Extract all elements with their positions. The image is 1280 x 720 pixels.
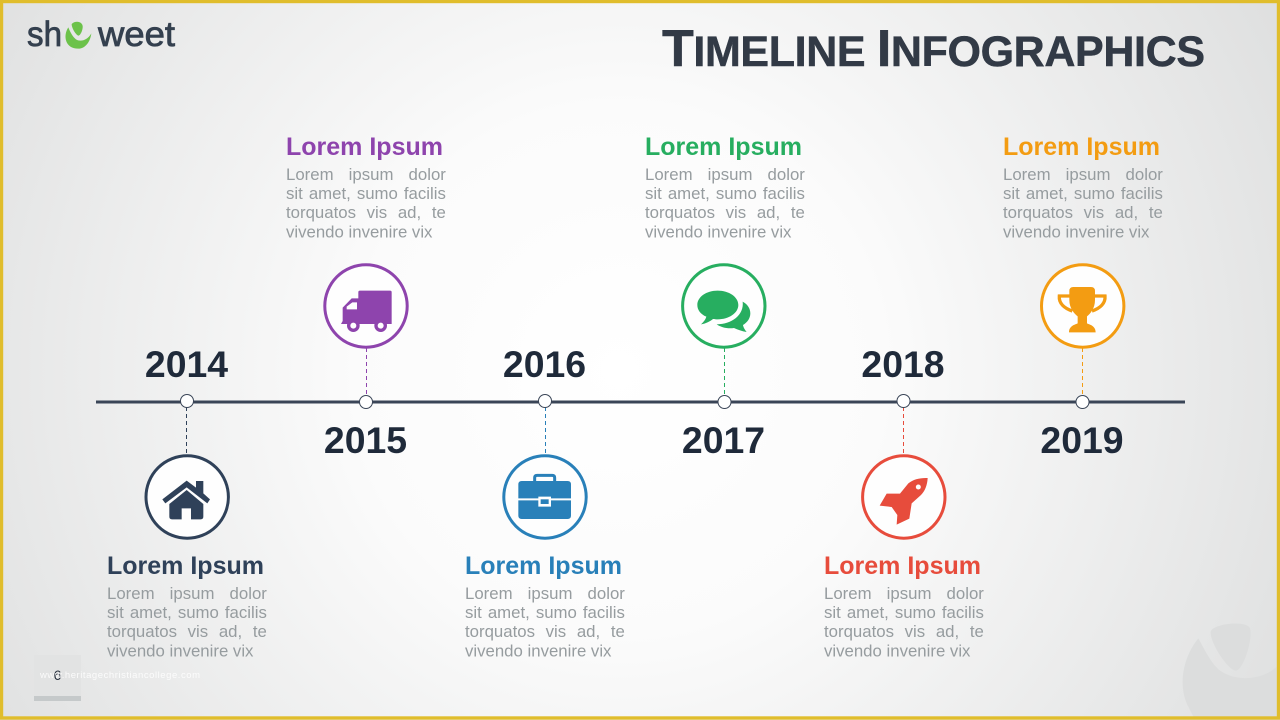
text block 2019: Lorem Ipsum: [1003, 133, 1160, 161]
text block 2017: sit amet, sumo facilis: [645, 184, 805, 203]
text block 2014: vivendo invenire vix: [107, 642, 254, 660]
logo: showeet: sh: [27, 15, 62, 54]
website watermark text: www.heritagechristiancollege.com: [39, 670, 200, 681]
timeline axis: [96, 400, 1185, 404]
text block 2016: torquatos vis ad, te: [465, 622, 625, 641]
text block 2019: [1003, 133, 1163, 242]
text block 2018: vivendo invenire vix: [824, 642, 971, 660]
icon: trophy in circle: [1042, 265, 1124, 347]
text block 2017: vivendo invenire vix: [645, 222, 792, 242]
connector 2016: [544, 407, 546, 455]
logo: showeet: weet: [97, 15, 175, 54]
node 2015: [360, 396, 372, 408]
text block 2016: Lorem ipsum dolor: [465, 584, 625, 603]
text block 2016: Lorem Ipsum: [465, 552, 622, 580]
text block 2015: Lorem ipsum dolor: [286, 165, 446, 184]
text block 2014: [107, 552, 267, 660]
text block 2015: vivendo invenire vix: [286, 222, 433, 242]
text block 2018: [824, 552, 984, 660]
year 2018: 2018: [861, 343, 945, 385]
text block 2014: torquatos vis ad, te: [107, 622, 267, 641]
icon: speech bubbles in circle: [683, 265, 765, 347]
text block 2018: Lorem Ipsum: [824, 552, 981, 580]
icon: truck in circle: [325, 265, 407, 347]
text block 2019: torquatos vis ad, te: [1003, 203, 1163, 222]
text block 2019: Lorem ipsum dolor: [1003, 165, 1163, 184]
milestone: 2016: [465, 343, 625, 660]
text block 2018: sit amet, sumo facilis: [824, 603, 984, 622]
logo: showeet: [27, 15, 175, 54]
text block 2014: sit amet, sumo facilis: [107, 603, 267, 622]
page number tab: [34, 655, 81, 701]
page number tab: 6: [54, 667, 62, 683]
text block 2015: [286, 133, 446, 242]
icon: house in circle: [146, 456, 228, 538]
text block 2017: torquatos vis ad, te: [645, 203, 805, 222]
text block 2015: sit amet, sumo facilis: [286, 184, 446, 203]
node 2018: [897, 394, 910, 408]
milestone: 2018: [824, 343, 984, 660]
milestone: 2019: [1003, 133, 1163, 461]
year 2016: 2016: [503, 343, 586, 385]
text block 2016: [465, 552, 625, 660]
icon: briefcase in circle: [504, 456, 586, 538]
year 2017: 2017: [682, 419, 765, 461]
text block 2018: torquatos vis ad, te: [824, 622, 984, 641]
text block 2019: sit amet, sumo facilis: [1003, 184, 1163, 203]
node 2016: [538, 394, 552, 408]
text block 2014: Lorem Ipsum: [107, 552, 264, 580]
text block 2017: Lorem ipsum dolor: [645, 165, 805, 184]
node 2014: [180, 394, 194, 408]
text block 2015: Lorem Ipsum: [286, 133, 443, 161]
text block 2015: torquatos vis ad, te: [286, 203, 446, 222]
text block 2017: Lorem Ipsum: [645, 133, 802, 161]
text block 2017: [645, 133, 805, 242]
connector 2017: [724, 348, 726, 395]
text block 2016: sit amet, sumo facilis: [465, 603, 625, 622]
connector 2015: [366, 348, 368, 395]
milestone: 2015: [286, 133, 446, 461]
connector 2019: [1082, 348, 1084, 395]
year 2019: 2019: [1040, 419, 1124, 461]
icon: rocket in circle: [863, 456, 945, 538]
year 2014: 2014: [145, 343, 228, 385]
node 2019: [1076, 396, 1089, 408]
milestone: 2014: [107, 343, 267, 660]
text block 2019: vivendo invenire vix: [1003, 222, 1150, 242]
year 2015: 2015: [324, 419, 407, 461]
watermark logo: [1183, 624, 1277, 717]
connector 2018: [902, 407, 904, 455]
connector 2014: [186, 407, 188, 455]
node 2017: [718, 396, 731, 408]
milestone: 2017: [645, 133, 805, 461]
text block 2016: vivendo invenire vix: [465, 642, 612, 660]
title: TIMELINE INFOGRAPHICS: [662, 20, 1205, 78]
text block 2014: Lorem ipsum dolor: [107, 584, 267, 603]
text block 2018: Lorem ipsum dolor: [824, 584, 984, 603]
